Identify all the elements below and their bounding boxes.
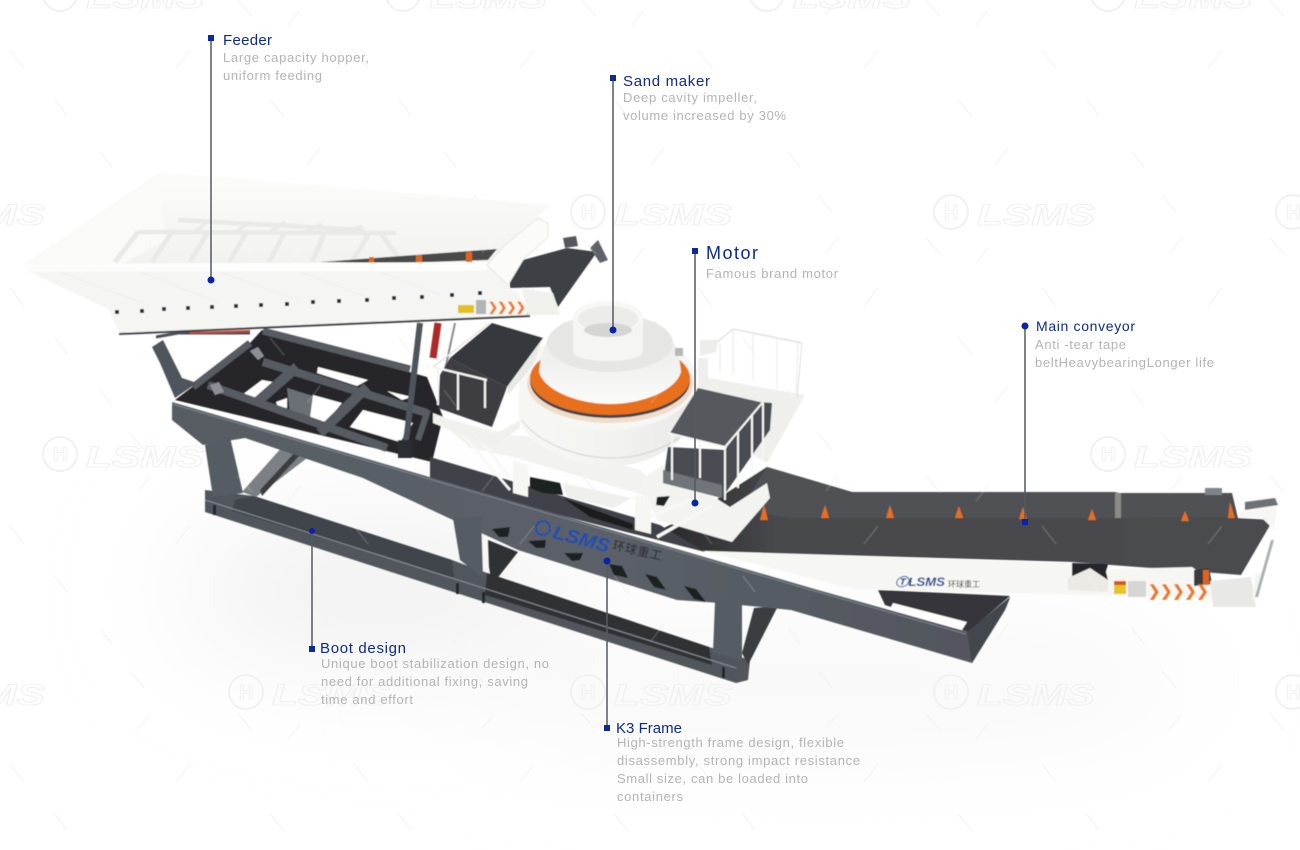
feeder hopper [22,172,608,335]
upper cone [539,322,681,404]
watermark logos: H [239,682,253,704]
frame logo: LSMS [551,522,612,558]
watermark logos: H [944,682,958,704]
hopper grizzly bars [115,220,400,262]
watermark logos: H [239,202,253,224]
watermark logos: LSMS [86,441,204,474]
watermark logos: LSMS [977,679,1095,712]
left support arm [152,340,197,398]
main beam with legs [172,402,1010,663]
watermark logos: H [944,202,958,224]
callout: boot design: time and effort [321,692,413,707]
callout: K3 frame: High-strength frame design, flexible [617,735,844,750]
callout: feeder [208,32,369,284]
callout: sand maker: volume increased by 30% [623,108,786,123]
main beam with legs: 环球重工 [611,538,663,563]
main conveyor [650,467,1278,607]
feeder discharge belt and chute [510,248,597,307]
watermark logos: LSMS [977,199,1095,232]
base skid [205,446,778,683]
callout: K3 frame: containers [617,789,684,804]
callout: motor: Famous brand motor [706,266,839,281]
callout: main conveyor: Anti -tear tape [1035,337,1126,352]
callout: motor [692,243,839,506]
callout: feeder: Feeder [223,32,272,49]
watermark logos: LSMS [1134,441,1252,474]
watermark logos: LSMS [614,199,732,232]
callout: boot design: need for additional fixing, saving [321,674,528,689]
rear end of main frame [878,590,1010,632]
callout: feeder: Large capacity hopper, [223,50,369,65]
back platform and railing [690,329,805,463]
callout: main conveyor: Main conveyor [1036,318,1135,334]
feeder frame rail [109,292,530,333]
orange ring [530,344,690,418]
hopper front face [25,268,515,310]
callout: boot design: Unique boot stabilization design, no [321,656,549,671]
callout: feeder: uniform feeding [223,68,322,83]
sand maker drum [519,301,718,466]
feed belt inside hopper [320,249,497,263]
belt logo: ⓉLSMS [895,576,945,589]
watermark logos: LSMS [272,199,390,232]
main conveyor: ❯❯❯❯❯ [1148,583,1208,600]
callout: K3 frame [604,558,860,804]
callout: main conveyor [1022,318,1214,525]
callout: sand maker: Deep cavity impeller, [623,90,757,105]
callout: sand maker: Sand maker [623,73,710,90]
hydraulic struts [398,323,455,458]
watermark logos: H [581,682,595,704]
right motor box [640,388,772,542]
watermark logos: LSMS [614,679,732,712]
beam windows [492,527,706,602]
head pulley [1237,505,1277,530]
sand maker platform [433,415,660,534]
callout: K3 frame: disassembly, strong impact resistance [617,753,860,768]
feeder hopper: ❯❯❯❯❯ [488,300,534,315]
leg bracing [242,446,311,497]
callout: K3 frame: K3 Frame [616,720,682,737]
callout: main conveyor: beltHeavybearingLonger life [1035,355,1214,370]
main conveyor: 环球重工 [948,579,980,589]
upper grid frame [152,330,443,462]
warning labels and chevrons [1114,581,1126,594]
tail plate [1210,577,1256,607]
frame under belt [704,551,1212,598]
left motor box [433,323,543,447]
watermark logos: H [1101,444,1115,466]
callout: motor: Motor [706,243,758,263]
watermark logos: H [53,444,67,466]
callout: boot design: Boot design [320,640,406,657]
feed tube [573,317,643,361]
watermark logos: H [581,202,595,224]
watermark logos: LSMS [272,679,390,712]
callout: sand maker [610,73,786,334]
frame logo [533,518,612,558]
callout: boot design [309,528,549,707]
orange cones [760,502,1235,521]
callout: K3 frame: Small size, can be loaded into [617,771,808,786]
